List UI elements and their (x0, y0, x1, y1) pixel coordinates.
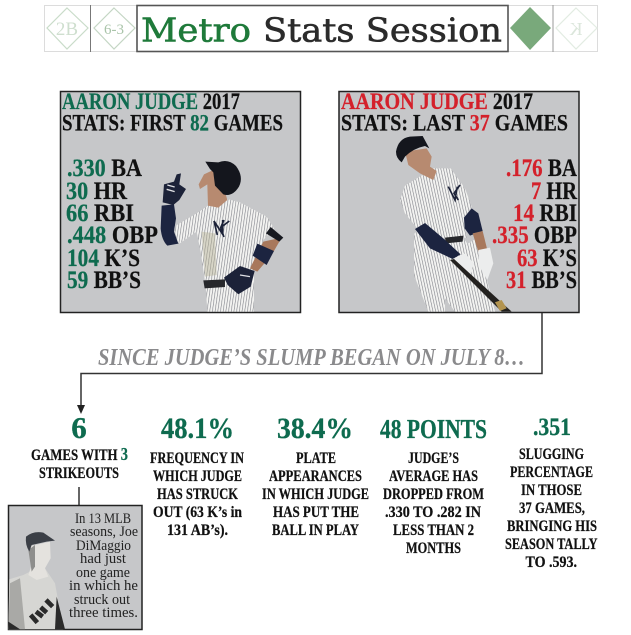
callout text (69, 511, 138, 621)
stat: .351 slugging percentage: BRINGING HIS (507, 518, 597, 535)
icon: 6-3 scorecard diamond: 6-3 (104, 22, 124, 38)
stat: .351 slugging percentage: .351 (533, 414, 571, 441)
banner title: Metro (141, 10, 251, 50)
photo: Judge after a swing (396, 136, 512, 312)
callout text: seasons, Joe (70, 524, 138, 540)
stat: 38.4% ball in play: IN WHICH JUDGE (262, 486, 369, 503)
stat: .351 slugging percentage: IN THOSE (521, 482, 582, 499)
stat: 48 points average drop: 48 POINTS (380, 414, 487, 444)
stat: .351 slugging percentage: SLUGGING (519, 446, 584, 463)
stat list: last 37 games: 7 HR (531, 178, 578, 205)
stat list: last 37 games: .176 BA (506, 155, 577, 182)
stat list: last 37 games: .335 OBP (492, 222, 577, 249)
callout: Joe DiMaggio (8, 506, 142, 630)
callout text: one game (76, 565, 130, 581)
stat: 6 games with 3 strikeouts (31, 410, 128, 482)
stat list: first 82 games: .330 BA (67, 155, 142, 182)
stat: .351 slugging percentage: TO .593. (526, 554, 577, 571)
callout text: DiMaggio (76, 538, 131, 554)
icon: backwards K scorecard diamond (556, 8, 597, 49)
arrow: connector from last 37 games panel to stats (77, 313, 542, 414)
connector line to DiMaggio callout (78, 487, 80, 505)
stat list: last 37 games: 63 K’S (517, 245, 577, 272)
panel: first 82 games (60, 89, 300, 312)
stat list: first 82 games: .448 OBP (67, 222, 158, 249)
callout text: had just (80, 551, 126, 567)
stat list: first 82 games: 104 K’S (67, 245, 140, 272)
icon: 2B scorecard diamond: 2B (56, 19, 78, 40)
banner: Metro Stats Session (44, 5, 598, 52)
stat list: last 37 games: 31 BB’S (506, 267, 577, 294)
heading: first 82 games (62, 89, 283, 136)
heading: last 37 games: STATS: LAST 37 GAMES (341, 110, 568, 136)
heading: last 37 games: AARON JUDGE 2017 (341, 89, 533, 114)
stat: .351 slugging percentage: 37 GAMES, (519, 500, 585, 517)
icon: backwards K scorecard diamond: K (570, 19, 582, 39)
heading: last 37 games (341, 89, 568, 136)
subheading: slump date: SINCE JUDGE’S SLUMP BEGAN ON JULY 8… (98, 345, 525, 371)
stat list: first 82 games (66, 155, 158, 294)
stat: 38.4% ball in play: PLATE (296, 450, 336, 467)
icon: 2B scorecard diamond (47, 8, 88, 49)
stat: 48.1% frequency struck out: 131 AB’s). (167, 522, 228, 539)
stat: 48.1% frequency struck out: HAS STRUCK (157, 486, 238, 503)
stat: 38.4% ball in play (262, 412, 369, 539)
heading: first 82 games: AARON JUDGE 2017 (62, 89, 240, 114)
stat: 6 games with 3 strikeouts: 6 (71, 410, 87, 445)
heading: first 82 games: STATS: FIRST 82 GAMES (62, 110, 283, 136)
stat: 48.1% frequency struck out: OUT (63 K’s in (153, 504, 242, 521)
callout text: In 13 MLB (75, 511, 131, 527)
stat: 48 points average drop: DROPPED FROM (383, 486, 484, 503)
banner title: Stats Session (263, 10, 502, 50)
photo: Joe DiMaggio (8, 532, 65, 629)
stat: 48.1% frequency struck out: 48.1% (161, 412, 234, 445)
stat: 38.4% ball in play: HAS PUT THE (273, 504, 359, 521)
stat: 48 points average drop (380, 414, 487, 557)
stat: 48 points average drop: JUDGE’S (408, 450, 459, 467)
stat: 38.4% ball in play: BALL IN PLAY (272, 522, 359, 539)
stat: 38.4% ball in play: APPEARANCES (269, 468, 362, 485)
stat: 6 games with 3 strikeouts: STRIKEOUTS (39, 465, 119, 482)
icon: 6-3 scorecard diamond (94, 8, 135, 49)
stat: 48 points average drop: LESS THAN 2 (393, 522, 474, 539)
stat: 48 points average drop: MONTHS (406, 540, 461, 557)
stat: 48.1% frequency struck out: WHICH JUDGE (153, 468, 242, 485)
stat: 48.1% frequency struck out (150, 412, 244, 539)
panel: last 37 games (339, 89, 579, 312)
stat list: first 82 games: 66 RBI (66, 200, 134, 227)
stat list: last 37 games (492, 155, 578, 294)
callout text: three times. (69, 605, 138, 621)
stat list: first 82 games: 59 BB’S (67, 267, 141, 294)
stat: .351 slugging percentage: PERCENTAGE (510, 464, 593, 481)
stat: 38.4% ball in play: 38.4% (277, 412, 353, 445)
stat: 48 points average drop: .330 TO .282 IN (385, 504, 481, 521)
callout text: struck out (74, 592, 130, 608)
stat: 6 games with 3 strikeouts: GAMES WITH 3 (31, 444, 128, 464)
stat list: last 37 games: 14 RBI (513, 200, 577, 227)
icon: filled diamond (510, 7, 551, 50)
stat: .351 slugging percentage (505, 414, 598, 571)
stat: .351 slugging percentage: SEASON TALLY (505, 536, 598, 553)
photo: Judge pointing up (161, 161, 283, 312)
stat list: first 82 games: 30 HR (66, 178, 128, 205)
stat: 48.1% frequency struck out: FREQUENCY IN (150, 450, 244, 467)
banner title (137, 6, 508, 52)
stat: 48 points average drop: AVERAGE HAS (389, 468, 478, 485)
callout text: in which he (69, 578, 138, 594)
